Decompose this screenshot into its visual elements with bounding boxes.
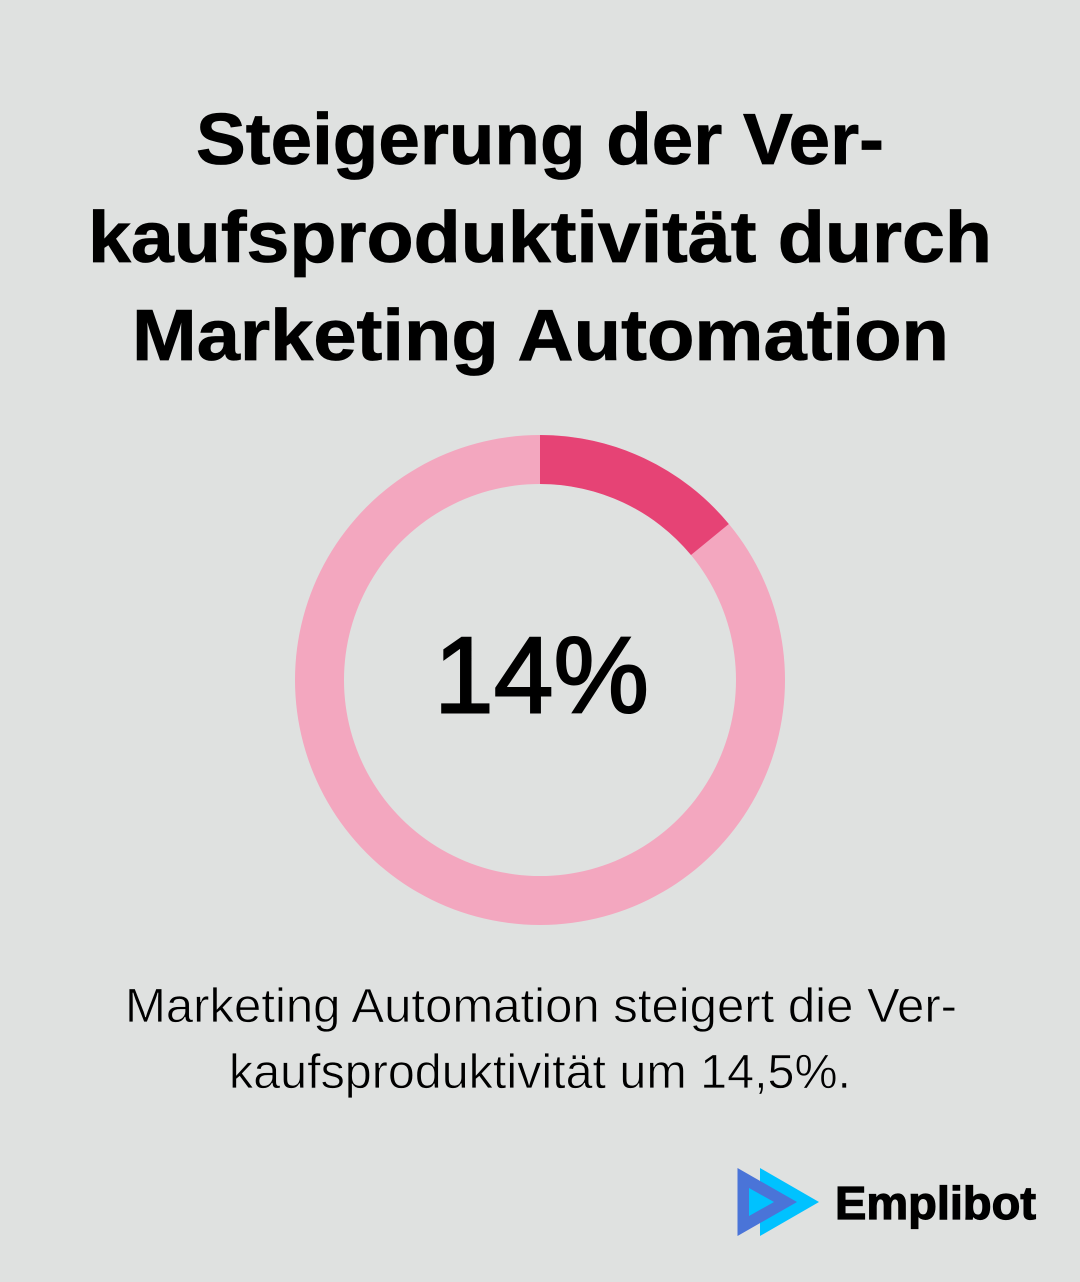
donut highlighted segment 14% <box>540 435 729 555</box>
logo: Emplibot <box>738 1168 1036 1236</box>
description text <box>125 980 957 1099</box>
donut chart <box>295 435 785 925</box>
title: kaufsproduktivität durch <box>88 198 992 278</box>
description text: kaufsproduktivität um 14,5%. <box>229 1046 851 1099</box>
title: Marketing Automation <box>132 296 949 376</box>
logo wordmark: Emplibot <box>835 1177 1036 1229</box>
donut remainder ring <box>295 435 785 925</box>
title: Steigerung der Ver- <box>196 100 884 180</box>
title <box>88 100 992 376</box>
icon: play triangles <box>738 1168 819 1236</box>
center value: 14% <box>434 614 649 736</box>
description text: Marketing Automation steigert die Ver- <box>125 980 957 1033</box>
